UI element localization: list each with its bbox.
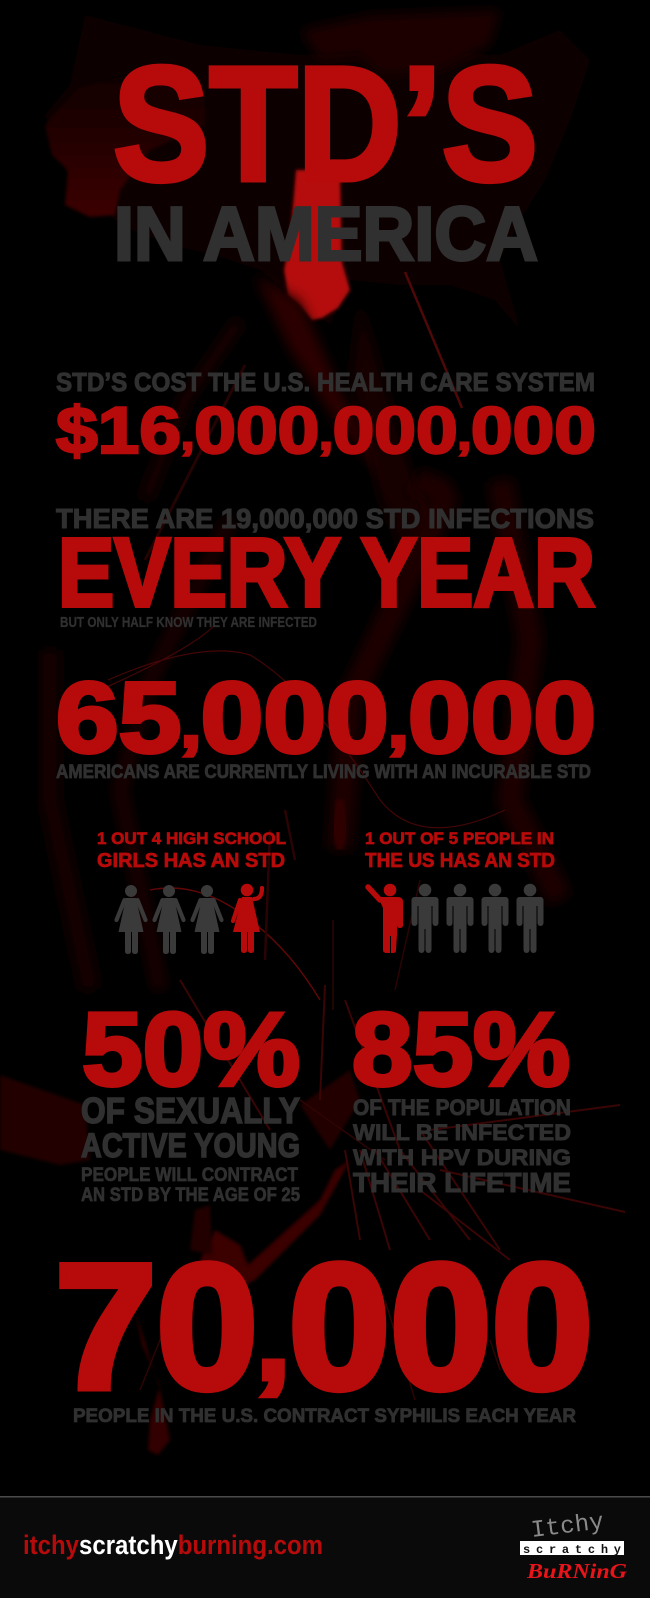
stat number: 000 (408, 662, 596, 774)
stat number: 000 (471, 393, 596, 467)
logo: Burning: BuRNinG (526, 1559, 627, 1583)
lower left blood stain (0, 1075, 90, 1165)
stat label: THERE ARE 19,000,000 STD INFECTIONS (56, 503, 594, 534)
map west coast blood stain (45, 75, 205, 217)
stat number: , (258, 1280, 289, 1401)
stat label: PEOPLE IN THE U.S. CONTRACT SYPHILIS EACH YEAR (73, 1405, 576, 1427)
stat number: 65 (56, 662, 167, 774)
icon: man (446, 884, 474, 953)
panel: high school girls (97, 829, 286, 954)
stat: syphilis (55, 1227, 593, 1427)
icon: man (482, 884, 508, 953)
upper streaks (255, 275, 440, 530)
stat: 50 percent (81, 992, 300, 1206)
heading: 1 OUT 4 HIGH SCHOOL (97, 829, 286, 848)
logo (520, 1509, 627, 1583)
text line: ACTIVE YOUNG (81, 1127, 300, 1165)
stat number: , (389, 691, 408, 760)
text line: PEOPLE WILL CONTRACT (81, 1165, 298, 1186)
icon: woman (192, 885, 222, 954)
mid splatter lines (100, 625, 505, 828)
footer band (0, 1497, 650, 1598)
stat number: 000 (194, 393, 319, 467)
stat number: 000 (289, 1227, 593, 1426)
subheading: IN AMERICA: IN AMERICA (114, 192, 538, 277)
stat number: $16 (56, 393, 166, 467)
stat number: 70 (55, 1227, 253, 1426)
stat number: , (181, 411, 194, 458)
top blood blotches (300, 10, 500, 75)
icon: man (516, 884, 544, 953)
stat: health care cost (56, 367, 596, 467)
map of America silhouette (45, 15, 590, 330)
stat number: , (319, 411, 333, 458)
stat label: AMERICANS ARE CURRENTLY LIVING WITH AN INCURABLE STD (56, 762, 591, 783)
icon: man (412, 884, 438, 953)
panel: people in the US (365, 829, 555, 953)
icon: man highlighted, arm raised (368, 884, 403, 953)
logo: scratchy letter tiles: scratchy (523, 1543, 621, 1557)
central blood drip (284, 170, 350, 320)
text line: THEIR LIFETIME (353, 1167, 571, 1198)
heading: STD'S: STD’S (113, 32, 538, 215)
stat number: , (458, 411, 471, 458)
logo: Itchy: Itchy (530, 1509, 605, 1545)
heading line 2: GIRLS HAS AN STD (97, 849, 285, 872)
stat label: STD’S COST THE U.S. HEALTH CARE SYSTEM (56, 367, 595, 397)
icon: woman highlighted, arm raised (233, 884, 262, 953)
text line: OF SEXUALLY (81, 1090, 300, 1131)
stat number: , (181, 691, 201, 760)
footer (0, 1496, 650, 1598)
stat number: 85% (352, 992, 570, 1108)
text line: AN STD BY THE AGE OF 25 (81, 1185, 300, 1206)
stat: infections each year (56, 503, 595, 631)
title (113, 32, 538, 277)
stat number: 50% (82, 992, 300, 1108)
text line: WITH HPV DURING (353, 1145, 571, 1170)
lower splatter and radiating lines (200, 1160, 350, 1290)
website url: itchyscratchyburning.com (23, 1530, 323, 1560)
icon: woman (116, 885, 146, 954)
stat: incurable (56, 662, 596, 783)
stat: 85 percent (352, 992, 571, 1198)
footnote: BUT ONLY HALF KNOW THEY ARE INFECTED (60, 614, 317, 631)
heading line 2: THE US HAS AN STD (365, 849, 555, 872)
stat number: 000 (333, 393, 458, 467)
stat number: 000 (201, 662, 389, 774)
text line: WILL BE INFECTED (353, 1120, 571, 1145)
heading: 1 OUT OF 5 PEOPLE IN (365, 829, 554, 848)
icon: woman (154, 885, 184, 954)
text line: OF THE POPULATION (353, 1095, 571, 1120)
